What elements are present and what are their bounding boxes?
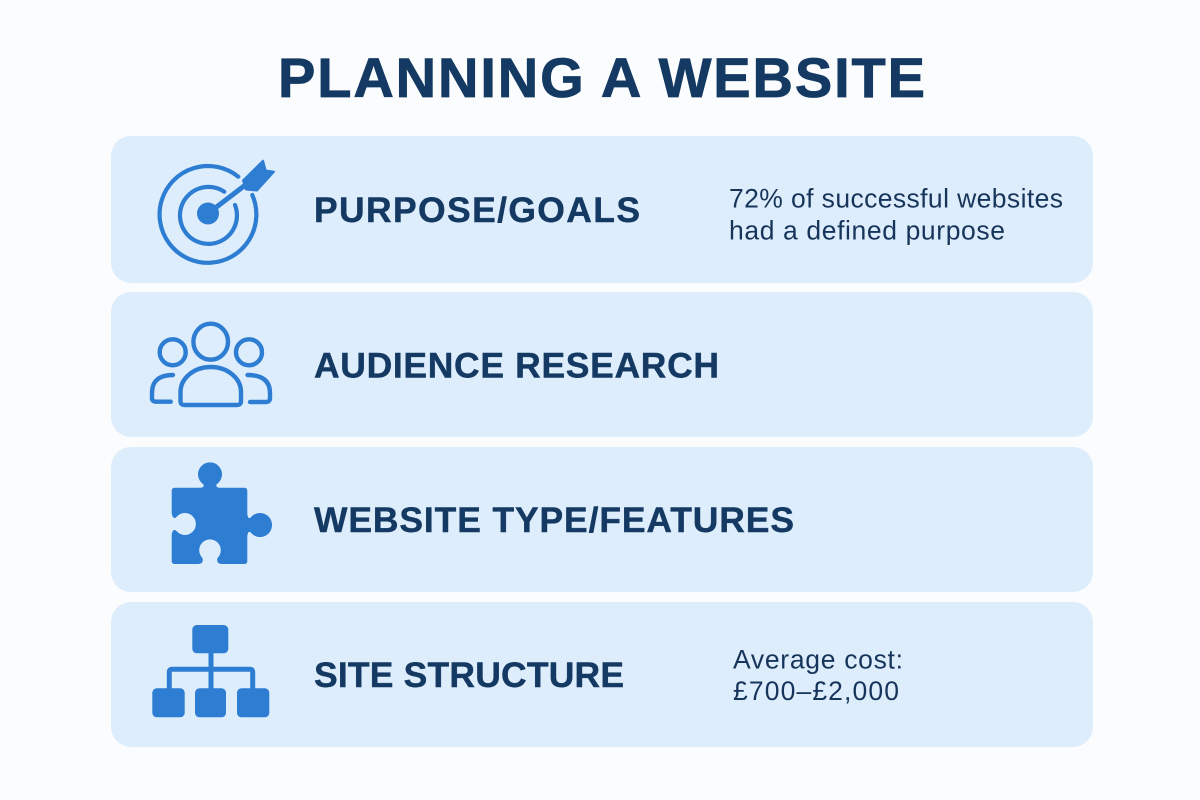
heading: website type/features: WEBSITE TYPE/FEATURES [314,500,794,540]
heading: audience research: AUDIENCE RESEARCH [314,346,719,386]
icon: site hierarchy [152,625,269,717]
heading: purpose/goals: PURPOSE/GOALS [314,190,640,230]
panel: site structure [111,602,1093,747]
icon: target with arrow [160,161,274,263]
text block: average cost: £700–£2,000 [733,676,899,706]
panel: website type/features [111,447,1093,592]
icon: puzzle piece [172,462,272,564]
panel: purpose/goals [111,136,1093,283]
heading: site structure: SITE STRUCTURE [314,655,624,695]
text block: average cost: Average cost: [733,644,903,674]
icon: group of people [152,324,270,405]
text block: purpose statistic: 72% of successful websites [729,184,1063,214]
panel: audience research [111,292,1093,437]
text block: purpose statistic: had a defined purpose [729,216,1005,246]
title: PLANNING A WEBSITE [278,46,925,109]
